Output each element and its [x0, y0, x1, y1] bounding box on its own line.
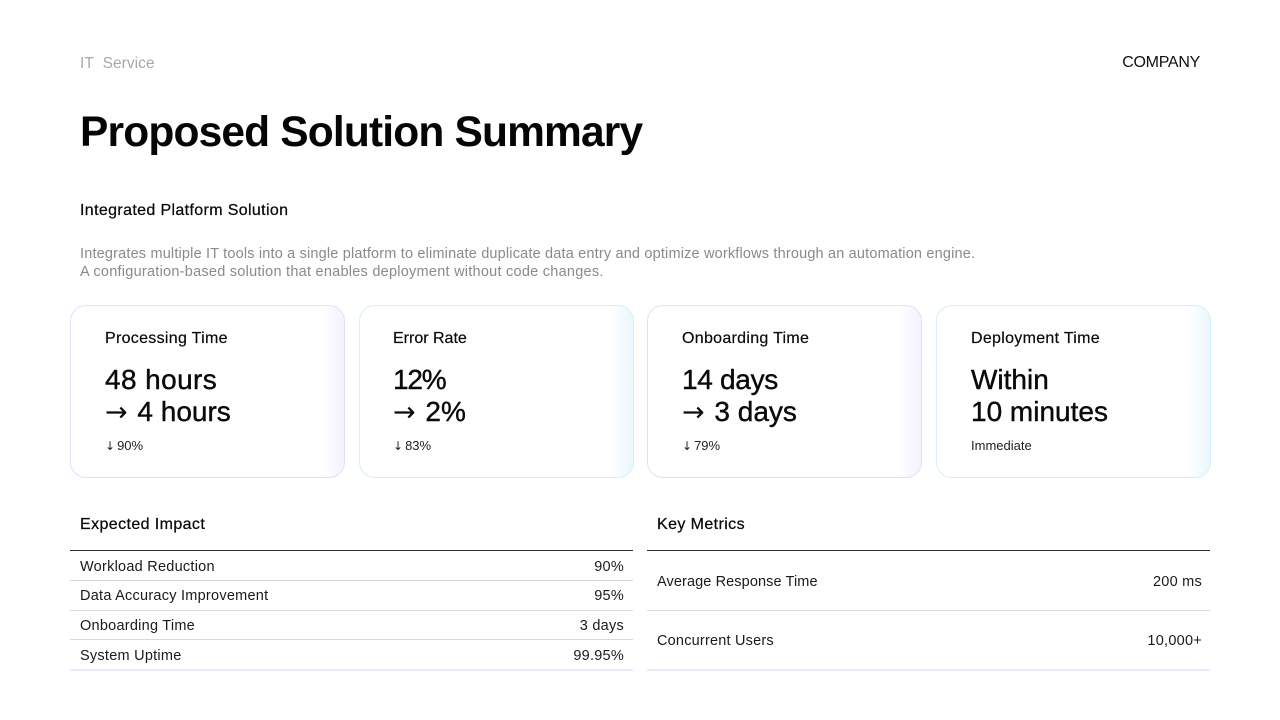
value: deployment time: 10 minutes — [971, 396, 1108, 427]
panel: expected impact table — [70, 516, 633, 671]
label: processing time: Processing Time — [105, 330, 228, 347]
row: system uptime: System Uptime — [80, 648, 182, 664]
label: deployment time: Deployment Time — [971, 330, 1100, 347]
change: processing time: ↓90% — [105, 438, 143, 453]
panel: error rate — [359, 305, 634, 478]
row: data accuracy improvement — [80, 588, 624, 604]
row: average response time — [657, 574, 1202, 590]
row: onboarding time: 3 days — [580, 618, 624, 634]
value: processing time: 48 hours — [105, 364, 217, 395]
change: deployment time: Immediate — [971, 438, 1032, 453]
row: data accuracy improvement: Data Accuracy Improvement — [80, 588, 268, 604]
value: error rate: → 2% — [393, 396, 466, 428]
row: average response time: 200 ms — [1153, 574, 1202, 590]
row: system uptime: 99.95% — [573, 648, 624, 664]
section label: IT Service — [80, 55, 155, 72]
row: onboarding time — [80, 618, 624, 634]
row: concurrent users: Concurrent Users — [657, 633, 774, 649]
value: processing time — [105, 364, 231, 428]
value: onboarding time: 14 days — [682, 364, 778, 395]
heading: expected impact: Expected Impact — [80, 516, 205, 533]
description text: A configuration-based solution that enables deployment without code changes. — [80, 264, 604, 280]
value: error rate — [393, 364, 466, 428]
heading: key metrics: Key Metrics — [657, 516, 745, 533]
title: Proposed Solution Summary — [80, 109, 642, 156]
company label: COMPANY — [1122, 54, 1200, 71]
change: error rate: ↓83% — [393, 438, 431, 453]
value: deployment time: Within — [971, 364, 1049, 395]
row: workload reduction: 90% — [594, 559, 624, 575]
description text — [80, 246, 975, 280]
value: error rate: 12% — [393, 364, 445, 395]
label: error rate: Error Rate — [393, 330, 467, 347]
row: average response time: Average Response Time — [657, 574, 818, 590]
row: concurrent users: 10,000+ — [1147, 633, 1202, 649]
panel: deployment time — [936, 305, 1211, 478]
description text: Integrates multiple IT tools into a single platform to eliminate duplicate data entry and optimize workflows through an automation engine. — [80, 246, 975, 262]
value: onboarding time: → 3 days — [682, 396, 797, 428]
panel: onboarding time — [647, 305, 922, 478]
subheading: Integrated Platform Solution — [80, 202, 288, 219]
row: data accuracy improvement: 95% — [594, 588, 624, 604]
value: onboarding time — [682, 364, 797, 428]
value: processing time: → 4 hours — [105, 396, 231, 428]
row: workload reduction: Workload Reduction — [80, 559, 215, 575]
value: deployment time — [970, 364, 1108, 427]
panel: processing time — [70, 305, 345, 478]
change: onboarding time: ↓79% — [682, 438, 720, 453]
row: workload reduction — [80, 559, 624, 575]
row: concurrent users — [657, 633, 1202, 649]
row: onboarding time: Onboarding Time — [80, 618, 195, 634]
row: system uptime — [80, 648, 624, 664]
label: onboarding time: Onboarding Time — [682, 330, 809, 347]
panel: key metrics table — [647, 516, 1210, 671]
